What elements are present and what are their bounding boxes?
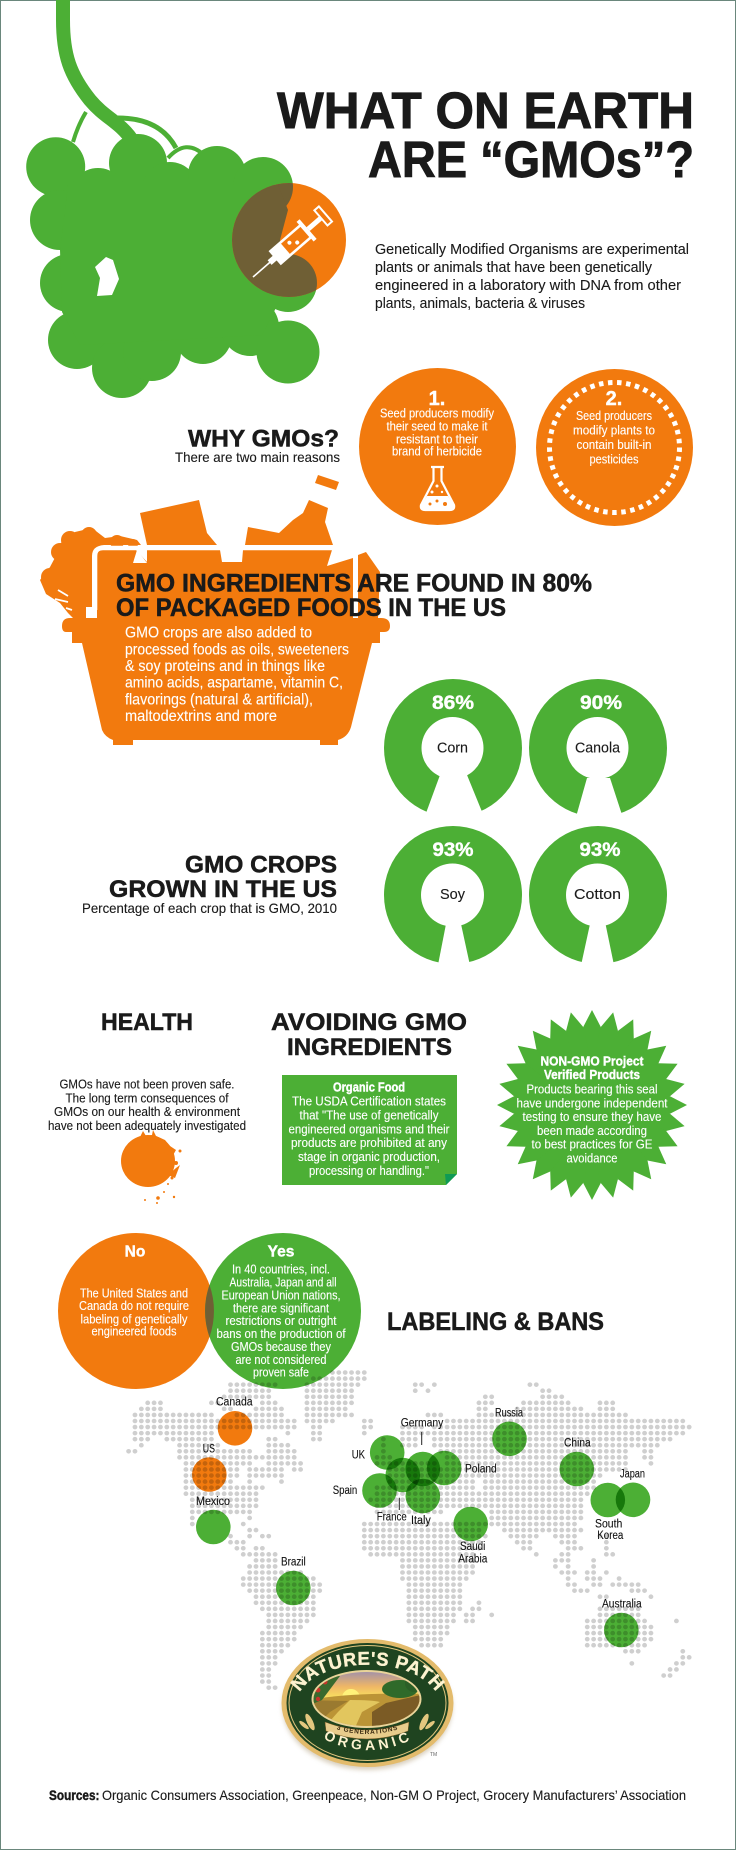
panel: reason 1 xyxy=(359,368,516,525)
panel: organic food xyxy=(282,1075,457,1185)
map labels: Korea xyxy=(597,1530,624,1542)
logo banner xyxy=(325,1722,409,1739)
world dot map xyxy=(129,1373,689,1688)
health text: have not been adequately investigated xyxy=(48,1119,246,1133)
panel: reason 1: their seed to make it xyxy=(386,419,488,433)
intro text: engineered in a laboratory with DNA from other xyxy=(375,277,681,294)
panel: yes labeling: proven safe xyxy=(253,1366,309,1380)
logo: Nature's Path: 3 GENERATIONS xyxy=(337,1725,398,1734)
panel: organic food: engineered organisms and their xyxy=(288,1122,450,1136)
basket text: flavorings (natural & artificial), xyxy=(125,691,313,708)
heading: GMO ingredients: GMO INGREDIENTS ARE FOUND IN 80% xyxy=(116,570,592,598)
donut chart: cotton xyxy=(529,826,667,970)
map labels: Poland xyxy=(465,1464,497,1476)
basket text: amino acids, aspartame, vitamin C, xyxy=(125,675,343,692)
panel: organic food: stage in organic production, xyxy=(298,1150,440,1164)
panel: no labeling: The United States and xyxy=(80,1286,188,1300)
icon: grape bunch on stem xyxy=(26,0,319,398)
panel: reason 2 xyxy=(536,369,693,526)
intro text xyxy=(375,241,689,312)
panel: non-GMO project seal: avoidance xyxy=(566,1151,618,1165)
icon: grocery basket xyxy=(40,475,390,745)
panel: non-GMO project seal: Verified Products xyxy=(544,1067,640,1082)
icon: syringe circle xyxy=(232,183,346,297)
heading: GMO ingredients xyxy=(116,570,592,622)
panel: yes labeling xyxy=(205,1233,361,1389)
panel: non-GMO project seal: have undergone independent xyxy=(516,1096,668,1110)
panel: non-GMO project seal: been made according xyxy=(537,1124,647,1138)
panel: no labeling: Canada do not require xyxy=(79,1299,189,1313)
map labels: Japan xyxy=(620,1468,645,1480)
basket text: & soy proteins and in things like xyxy=(125,658,325,675)
panel: organic food: products are prohibited at any xyxy=(291,1136,448,1150)
donut chart: soy: Soy xyxy=(440,886,465,903)
heading: why GMOs: WHY GMOs? xyxy=(188,426,339,453)
panel: reason 1: Seed producers modify xyxy=(380,406,495,420)
basket text: processed foods as oils, sweeteners xyxy=(125,641,349,658)
map labels: Brazil xyxy=(281,1557,306,1569)
basket text xyxy=(125,625,349,725)
panel: reason 2: pesticides xyxy=(590,452,638,466)
panel: reason 2: modify plants to xyxy=(573,423,655,437)
health text: GMOs on our health & environment xyxy=(54,1105,240,1119)
title: WHAT ON EARTH xyxy=(277,82,694,139)
panel: non-GMO project seal: to best practices for GE xyxy=(532,1137,652,1151)
broccoli xyxy=(40,528,141,618)
panel: yes labeling: In 40 countries, incl. xyxy=(232,1262,330,1276)
donut chart: soy: 93% xyxy=(432,839,474,861)
map markers: no-label countries xyxy=(192,1411,252,1492)
map labels: China xyxy=(564,1438,591,1450)
map labels: Saudi xyxy=(460,1541,485,1553)
panel: yes labeling: bans on the production of xyxy=(216,1327,346,1341)
sources: Sources: xyxy=(49,1787,100,1803)
icon: flask xyxy=(421,467,454,511)
heading: why GMOs xyxy=(175,426,340,465)
icon: orange splat xyxy=(121,1130,182,1204)
health text: The long term consequences of xyxy=(66,1091,229,1105)
heading: GMO ingredients: OF PACKAGED FOODS IN THE US xyxy=(116,594,506,622)
panel: organic food: that "The use of genetically xyxy=(300,1108,439,1122)
heading: health: HEALTH xyxy=(101,1009,193,1036)
panel: no labeling: labeling of genetically xyxy=(80,1312,188,1326)
panel: yes labeling: GMOs because they xyxy=(231,1340,332,1354)
logo scene xyxy=(314,1672,420,1726)
heading: GMO crops: GMO CROPS xyxy=(185,851,337,878)
panel: no labeling: No xyxy=(125,1244,145,1261)
panel: reason 1: 1. xyxy=(429,388,445,410)
logo: Nature's Path: NATURE'S PATH xyxy=(290,1652,445,1692)
heading: avoiding GMO ingredients xyxy=(271,1009,467,1061)
panel: reason 2: Seed producers xyxy=(576,409,652,423)
panel: yes labeling: there are significant xyxy=(233,1301,329,1315)
groceries xyxy=(97,550,353,618)
map labels: UK xyxy=(352,1449,365,1461)
donut chart: cotton: 93% xyxy=(580,839,620,861)
panel: reason 2: contain built-in xyxy=(576,438,652,452)
logo: Nature's Path xyxy=(280,1639,455,1772)
donut chart: canola: Canola xyxy=(575,740,621,757)
map labels: Spain xyxy=(333,1485,357,1497)
map labels: Mexico xyxy=(196,1496,230,1508)
health text: GMOs have not been proven safe. xyxy=(60,1077,234,1091)
logo: Nature's Path: TM xyxy=(430,1752,437,1758)
panel: reason 1: brand of herbicide xyxy=(392,445,482,459)
heading: GMO crops: Percentage of each crop that is GMO, 2010 xyxy=(82,900,337,916)
map labels: Russia xyxy=(495,1408,523,1420)
panel: no labeling: engineered foods xyxy=(92,1325,176,1339)
title: ARE “GMOs”? xyxy=(368,131,694,188)
heading: why GMOs: There are two main reasons xyxy=(175,449,340,465)
map labels: Arabia xyxy=(458,1553,488,1565)
panel: yes labeling: restrictions or outright xyxy=(226,1314,337,1328)
panel: no labeling xyxy=(58,1233,214,1389)
donut chart: soy xyxy=(384,826,522,970)
panel: yes labeling: are not considered xyxy=(236,1353,327,1367)
panel: non-GMO project seal: Products bearing this seal xyxy=(526,1082,658,1096)
donut chart: corn: 86% xyxy=(432,692,474,714)
panel: organic food: Organic Food xyxy=(333,1080,405,1095)
logo: Nature's Path: ORGANIC xyxy=(325,1732,409,1750)
logo wheat ornaments xyxy=(298,1713,436,1731)
panel: organic food: The USDA Certification states xyxy=(292,1095,446,1109)
panel: non-GMO project seal: NON-GMO Project xyxy=(540,1054,644,1069)
intro text: plants, animals, bacteria & viruses xyxy=(375,295,585,312)
map labels: Italy xyxy=(411,1515,431,1527)
panel: yes labeling: Australia, Japan and all xyxy=(230,1275,336,1289)
donut chart: corn xyxy=(384,679,522,824)
map labels: Germany xyxy=(401,1418,444,1430)
basket text: GMO crops are also added to xyxy=(125,625,312,642)
panel: yes labeling: Yes xyxy=(268,1244,294,1261)
map labels xyxy=(196,1397,645,1610)
panel: reason 2: 2. xyxy=(606,388,622,410)
map labels: South xyxy=(595,1518,622,1530)
map labels: US xyxy=(203,1443,215,1455)
heading: GMO crops xyxy=(82,851,337,916)
panel: yes labeling: European Union nations, xyxy=(222,1288,340,1302)
basket body xyxy=(62,618,390,745)
sources: Organic Consumers Association, Greenpeace, Non-GM O Project, Grocery Manufacturers’ Association xyxy=(102,1787,686,1803)
panel: reason 1: resistant to their xyxy=(396,432,478,446)
title xyxy=(277,82,694,188)
map labels: France xyxy=(377,1512,407,1524)
panel: non-GMO project seal: testing to ensure they have xyxy=(522,1110,662,1124)
heading: avoiding GMO ingredients: INGREDIENTS xyxy=(287,1034,452,1061)
donut chart: corn: Corn xyxy=(437,740,468,757)
donut chart: cotton: Cotton xyxy=(574,886,621,903)
panel: organic food: processing or handling." xyxy=(309,1164,429,1178)
heading: labeling and bans: LABELING & BANS xyxy=(387,1308,604,1336)
heading: avoiding GMO ingredients: AVOIDING GMO xyxy=(271,1009,467,1036)
basket text: maltodextrins and more xyxy=(125,708,277,725)
heading: GMO crops: GROWN IN THE US xyxy=(109,876,337,903)
intro text: plants or animals that have been genetically xyxy=(375,259,652,276)
donut chart: canola xyxy=(529,679,667,824)
map labels: Australia xyxy=(602,1598,642,1610)
health text xyxy=(48,1077,246,1133)
map labels: Canada xyxy=(216,1397,253,1409)
map markers: ban countries xyxy=(196,1422,650,1647)
intro text: Genetically Modified Organisms are experimental xyxy=(375,241,689,258)
donut chart: canola: 90% xyxy=(580,692,622,714)
panel: non-GMO project seal xyxy=(497,1010,687,1200)
